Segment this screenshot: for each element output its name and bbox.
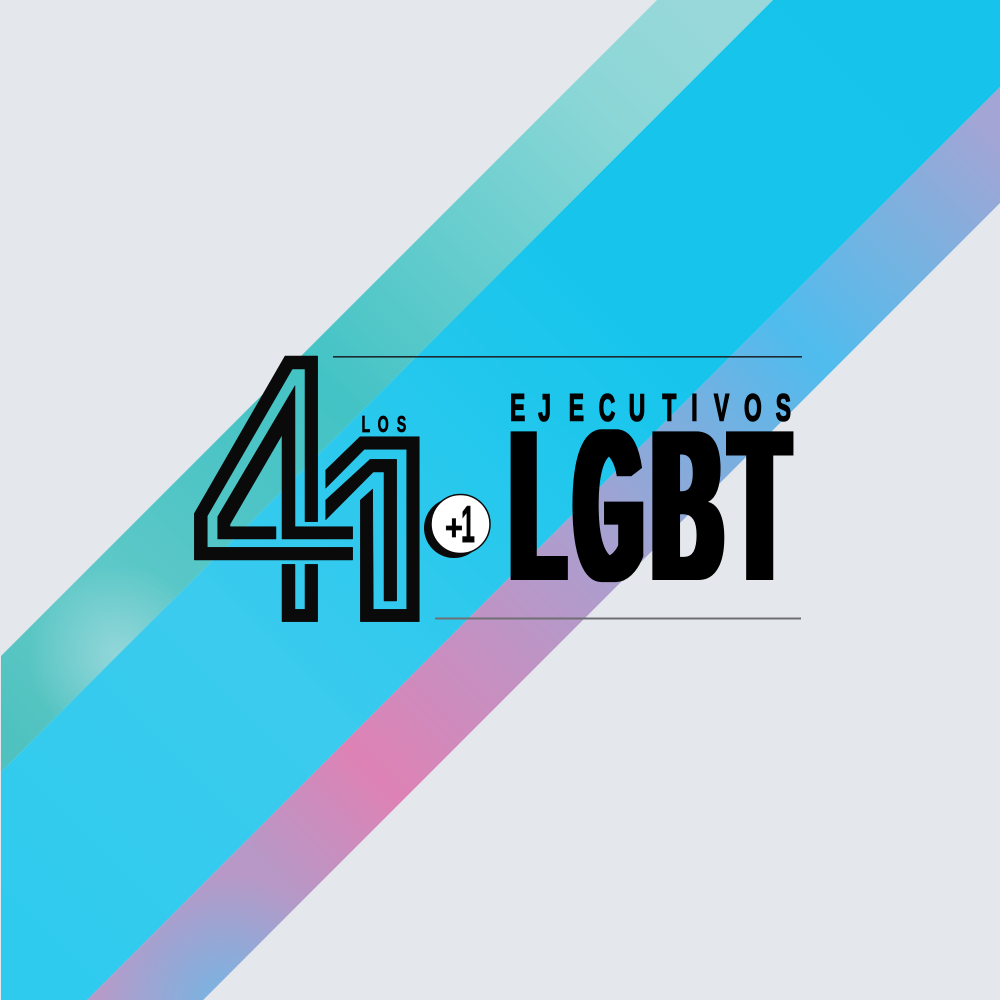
badge disc [431, 494, 490, 554]
top rule [333, 356, 802, 358]
numeral 1: inner line [326, 459, 397, 601]
letter L: L [512, 385, 563, 626]
numeral 4: inner line [218, 386, 353, 539]
letter T: T [732, 386, 787, 627]
badge: +1 [424, 494, 490, 558]
heading: EJECUTIVOS: EJECUTIVOS [510, 387, 791, 429]
letter G: G [576, 385, 642, 626]
label: LOS: LOS [361, 413, 406, 438]
numeral 1: outer line [326, 437, 419, 622]
numeral 4: stem [282, 564, 318, 622]
badge plus sign: + [445, 509, 463, 549]
bottom rule [435, 618, 801, 620]
band: teal diagonal [1, 0, 773, 772]
heading: LGBT [512, 385, 787, 627]
numeral 4: outer line [194, 356, 353, 560]
logo numeral 41 [194, 356, 419, 622]
letter B: B [653, 386, 722, 627]
badge digit one: 1 [461, 495, 475, 553]
badge shadow [424, 498, 484, 558]
